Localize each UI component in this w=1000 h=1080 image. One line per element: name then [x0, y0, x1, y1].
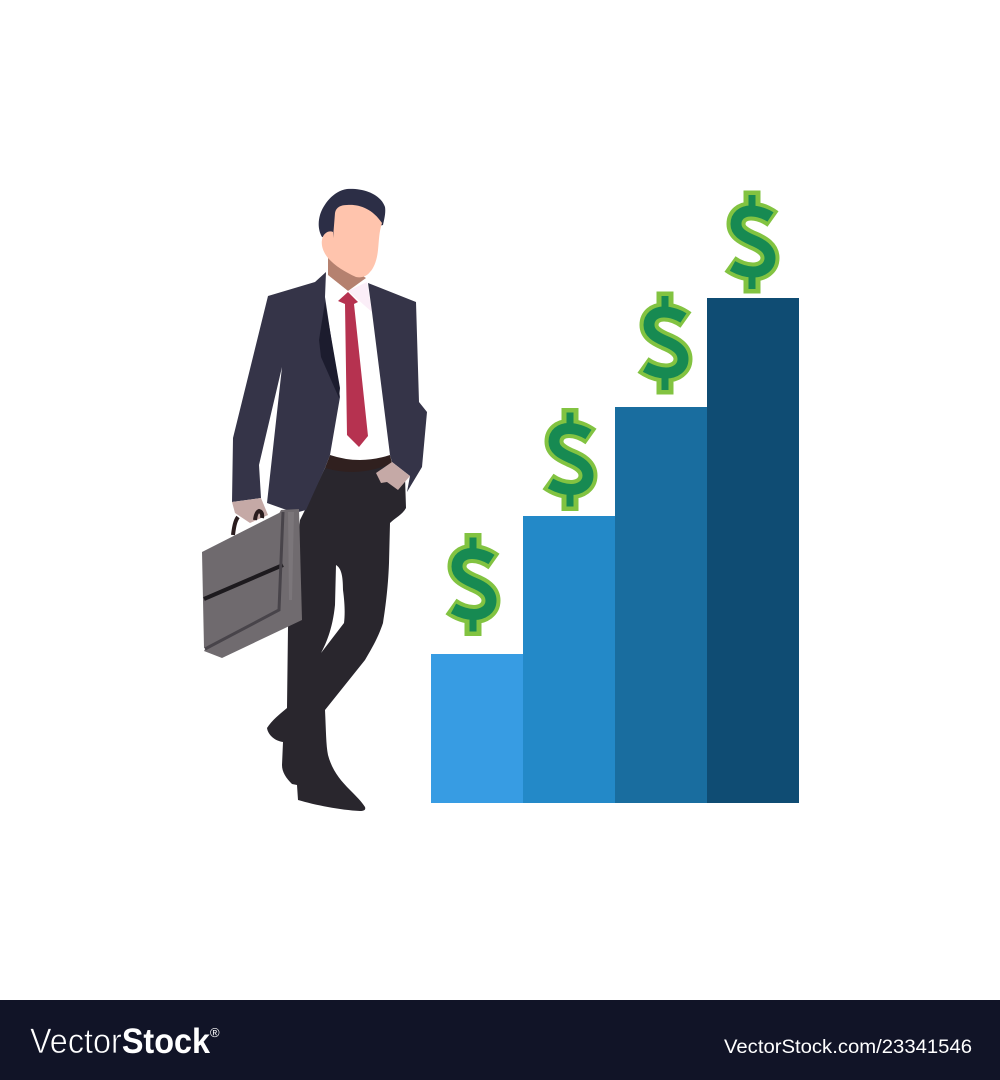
briefcase [202, 509, 302, 658]
shirt collar shade [348, 282, 372, 312]
belt [325, 455, 392, 472]
briefcase handle [233, 517, 238, 535]
bar chart: four rising steps [431, 298, 799, 803]
hand holding briefcase [232, 498, 268, 523]
figure: businessman [202, 189, 427, 811]
registered mark: ® [210, 1025, 220, 1040]
icon: dollar 1 [451, 533, 494, 636]
hair [319, 189, 385, 239]
footer bar [0, 1000, 1000, 1080]
footer logo: VectorStock [30, 1022, 210, 1061]
bar 3 [615, 407, 707, 803]
briefcase flap line [204, 565, 283, 599]
trousers and shoes [267, 463, 406, 811]
briefcase side highlight [288, 512, 294, 600]
face [322, 205, 382, 277]
hand in pocket [376, 462, 410, 490]
bar 4 [707, 298, 799, 803]
footer image id: VectorStock.com/23341546 [724, 1037, 972, 1058]
icon: dollar 2 [548, 408, 591, 511]
shirt [325, 273, 388, 460]
briefcase handle over hand [255, 511, 262, 520]
jacket right side [368, 283, 427, 492]
neck [328, 255, 366, 291]
briefcase front [202, 512, 281, 648]
bar 1 [431, 654, 523, 803]
bar 2 [523, 516, 615, 803]
icon: dollar 4 [730, 190, 773, 294]
briefcase side [204, 509, 302, 658]
icon: dollar 3 [643, 292, 686, 394]
briefcase edge shade [205, 512, 283, 649]
tie [338, 292, 368, 447]
jacket left side [232, 272, 340, 513]
jacket lapel shadow [319, 302, 340, 398]
